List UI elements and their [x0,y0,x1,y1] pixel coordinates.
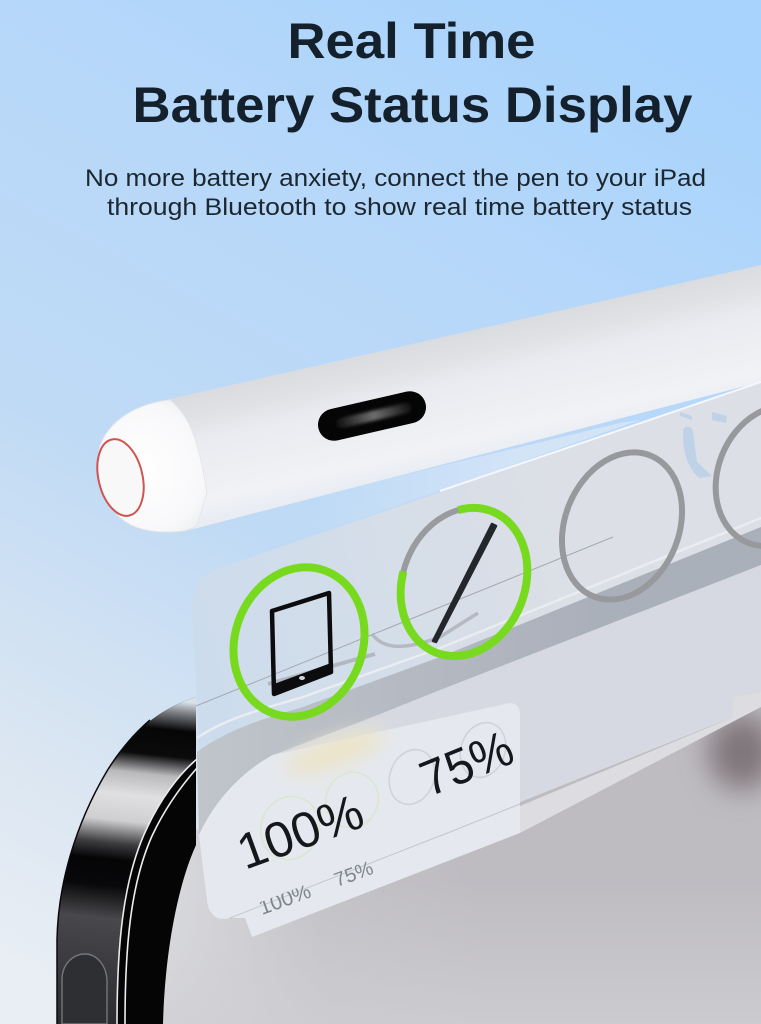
icon: pen battery ring [379,489,549,675]
side button [62,954,107,1024]
silver second line [125,768,197,1024]
tablet screen area [160,560,761,1024]
stylus pen [90,265,761,540]
subtitle: through Bluetooth to show real time battery status [107,194,692,221]
title [132,13,693,133]
tablet black frame [57,697,197,1024]
battery readout card [199,703,521,937]
silver inner line [117,759,197,1024]
glossy outer band [57,697,196,1024]
faint watermark icon [680,412,727,478]
thin reflection line [196,537,613,706]
subtitle: No more battery anxiety, connect the pen to your iPad [85,165,706,192]
reflected labels [260,862,373,914]
pale wedge below panel [520,692,761,833]
tablet edge stripe [197,518,761,738]
stand bar [268,654,375,684]
icon: tablet battery ring [213,549,385,735]
transparent status panel [192,382,761,919]
empty battery ring 3 [541,434,703,618]
gray tablet edge band [197,527,761,835]
outer edge line [57,720,150,1024]
panel lower edge line [230,804,520,918]
pen body [165,265,761,531]
title: Battery Status Display [132,77,693,133]
pen cap [98,400,207,532]
lower panel surface [199,565,761,919]
warm glow [281,721,389,783]
pale gap between pen and panel [300,420,640,540]
title: Real Time [288,13,536,69]
charging port [315,388,429,444]
icon: pen [433,524,496,642]
faint rings behind numbers [252,716,513,868]
panel top highlight [440,382,761,491]
red tip ring [90,435,151,520]
icon: tablet [272,593,331,694]
shelf arc [372,613,478,646]
reflected 75% label: 75% [331,857,377,892]
reflected 100% label: 100% [256,880,314,920]
100% value: 100% [230,783,371,880]
empty battery ring 4 [695,388,761,564]
subtitle [85,165,706,221]
75% value: 75% [412,720,521,807]
